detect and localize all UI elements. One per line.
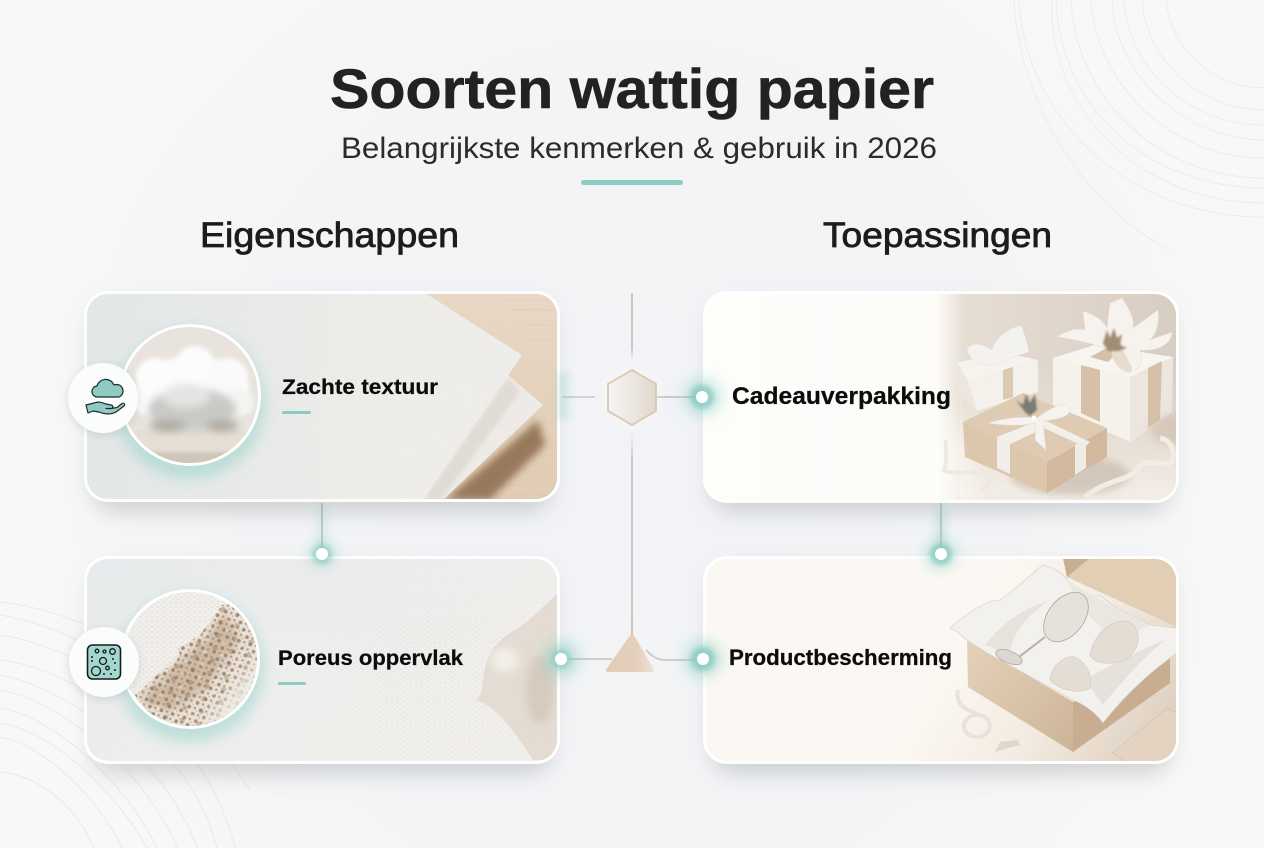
heading: Eigenschappen: Eigenschappen	[200, 216, 459, 255]
label: Poreus oppervlak: Poreus oppervlak	[278, 647, 463, 670]
accent bar	[278, 682, 306, 685]
wine glass	[1043, 592, 1089, 642]
icon: triangle hub	[608, 636, 652, 670]
small white box	[958, 356, 1038, 381]
card shadows	[92, 304, 1171, 774]
connector glows	[309, 372, 956, 677]
large flower bow	[1057, 298, 1172, 373]
accent bar	[282, 411, 311, 414]
large white box	[1053, 345, 1173, 377]
kraft box	[1010, 455, 1130, 495]
label: Productbescherming: Productbescherming	[729, 645, 952, 670]
tape curl	[957, 690, 990, 737]
panel: Zachte textuur	[67, 291, 560, 502]
decorative arcs bottom left	[0, 602, 280, 848]
illustration: open box with glassware	[950, 558, 1177, 762]
cloth fold	[475, 593, 558, 760]
title: Soorten wattig papier	[330, 57, 934, 120]
icon: hexagon hub	[608, 370, 656, 425]
panel: Poreus oppervlak	[68, 556, 560, 764]
illustration: gift boxes	[942, 298, 1176, 498]
icon badge: cloud in hand	[67, 363, 139, 436]
connector nodes	[312, 385, 952, 671]
kraft bow	[988, 405, 1070, 450]
decorative arcs top right	[1014, 0, 1264, 250]
wood background	[420, 293, 558, 500]
heading: Toepassingen: Toepassingen	[823, 216, 1052, 255]
tumblers	[1090, 621, 1138, 663]
label: Cadeauverpakking: Cadeauverpakking	[732, 383, 951, 410]
small bow	[967, 326, 1029, 365]
label: Zachte textuur: Zachte textuur	[282, 376, 438, 399]
panel: Cadeauverpakking	[703, 291, 1210, 505]
icon badge: pores	[68, 627, 140, 700]
central connector lines	[322, 293, 941, 660]
ribbons	[944, 440, 989, 490]
circle image: porous surface	[116, 589, 264, 742]
circle image: cloud	[115, 324, 265, 479]
panel: Productbescherming	[703, 556, 1179, 764]
title underline	[581, 180, 683, 185]
subtitle: Belangrijkste kenmerken & gebruik in 2026	[341, 132, 937, 165]
